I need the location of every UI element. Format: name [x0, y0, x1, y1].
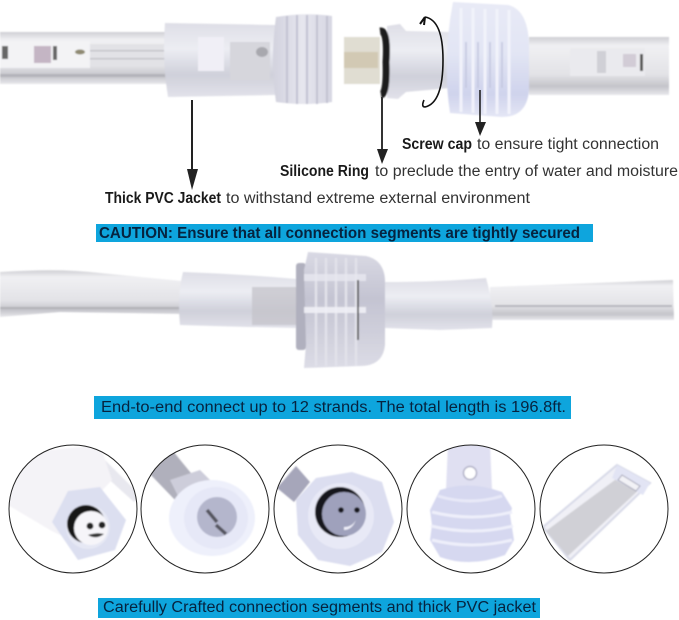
banner: caution: CAUTION: Ensure that all connection segments are tightly secured [99, 225, 580, 242]
photo: right strip with silicone ring and screw cap [344, 2, 669, 117]
detail circle: pin connector [141, 445, 269, 573]
icon: rotation arrow [420, 17, 443, 107]
label: screw cap [402, 136, 659, 153]
label: PVC jacket: Thick PVC Jacket [105, 190, 221, 207]
photo: joined connector [0, 252, 674, 368]
arrow: PVC jacket [187, 100, 198, 190]
banner: carefully crafted: Carefully Crafted connection segments and thick PVC jacket [103, 599, 537, 616]
banner: end-to-end [94, 396, 571, 419]
label: silicone ring: Silicone Ring [280, 163, 369, 180]
detail circle: threaded end cap [407, 444, 535, 573]
label: screw cap: Screw cap [402, 136, 472, 153]
detail circle: cut PVC jacket [540, 445, 668, 573]
arrow: screw cap [475, 90, 486, 136]
detail circle: white controller plug [8, 440, 140, 573]
label: PVC jacket [105, 190, 531, 207]
label: PVC jacket: to withstand extreme external environment [226, 190, 531, 207]
label: silicone ring: to preclude the entry of water and moisture [375, 163, 678, 180]
arrow: silicone ring [377, 97, 388, 164]
label: screw cap: to ensure tight connection [477, 136, 659, 153]
banner: end-to-end: End-to-end connect up to 12 strands. The total length is 196.8ft. [101, 399, 566, 416]
photo: left strip with threaded connector [0, 14, 332, 104]
detail circle: socket connector [274, 445, 402, 573]
